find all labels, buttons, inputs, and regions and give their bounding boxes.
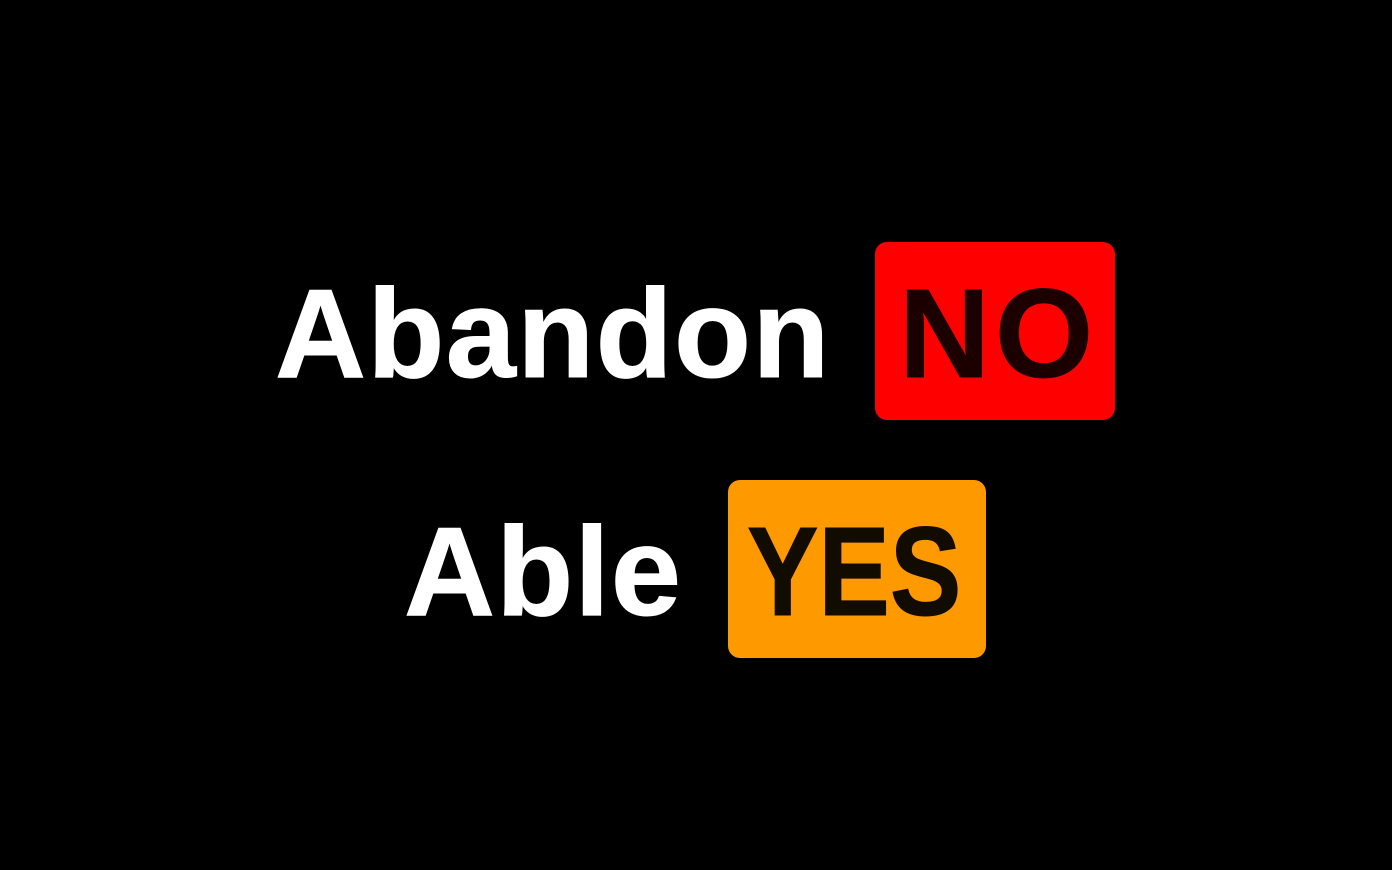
badge: YES <box>728 480 986 658</box>
badge label: YES: YES <box>747 501 961 642</box>
word: Abandon: Abandon <box>275 263 831 404</box>
badge label: NO: NO <box>899 263 1098 404</box>
word: Able: Able <box>404 501 682 642</box>
badge: NO <box>875 242 1115 420</box>
